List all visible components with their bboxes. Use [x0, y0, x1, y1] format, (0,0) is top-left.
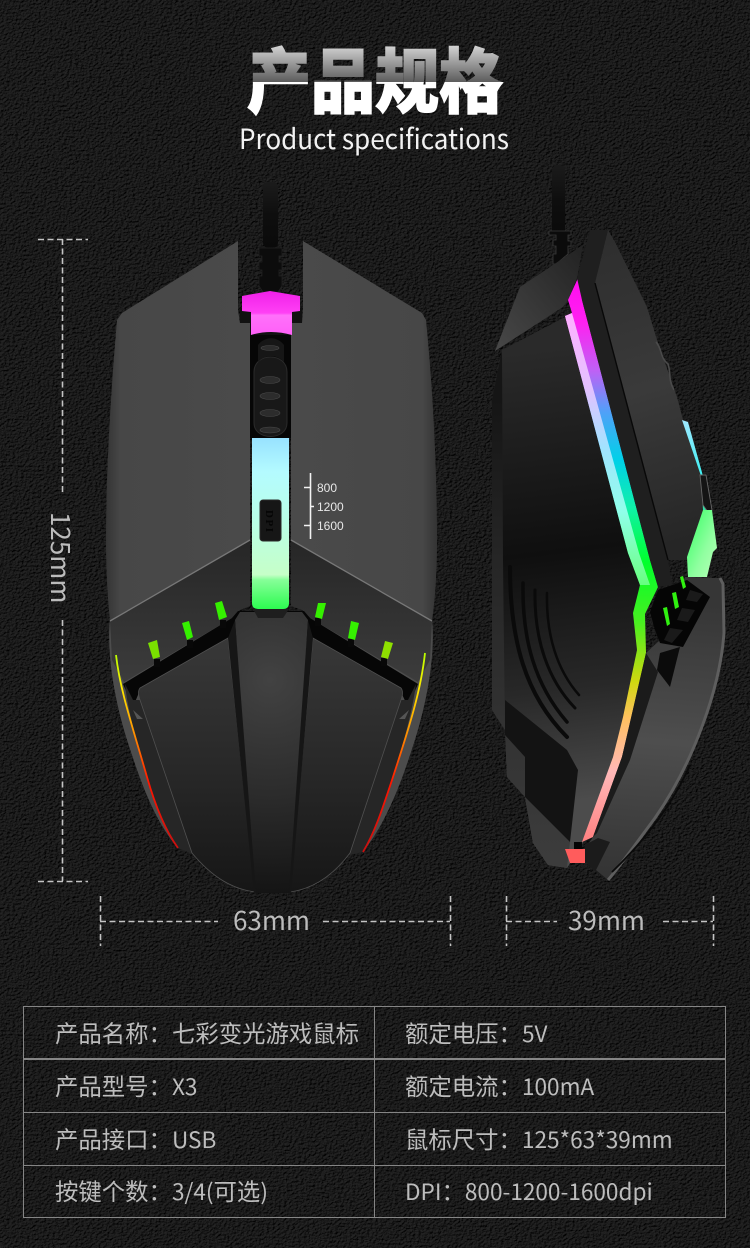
right chevron panel [291, 540, 432, 682]
side button [700, 475, 712, 512]
specifications table [24, 1006, 726, 1218]
side shell seam [595, 283, 668, 560]
green leds [148, 601, 393, 659]
palm left panel [138, 638, 255, 892]
side vent grills [510, 567, 579, 737]
left side strip panel [125, 684, 197, 856]
left chevron panel [110, 540, 250, 682]
right side strip panel [345, 684, 416, 856]
side view mouse [492, 165, 724, 880]
DPI scale: 800 [317, 481, 337, 495]
pink shoulders [240, 308, 302, 335]
black notch [574, 842, 582, 849]
side cable [549, 165, 571, 264]
left wing plate [106, 241, 250, 621]
centre channel [250, 320, 291, 438]
row 1 right: 额定电压：5V [405, 1015, 547, 1049]
left rgb strip [116, 655, 178, 848]
palm right panel [290, 638, 402, 892]
shell lower dark block [585, 838, 610, 880]
side dark band [577, 230, 672, 587]
cyan light [682, 420, 706, 510]
width dimension [100, 896, 450, 946]
side body left edge [492, 350, 570, 868]
black slot around palm [123, 611, 418, 707]
row 4 left: 按键个数：3/4(可选) [55, 1173, 268, 1207]
DPI scale: 1200 [317, 500, 344, 514]
side top wing [495, 245, 583, 351]
width dimension: 63mm [233, 901, 310, 938]
row 2 left: 产品型号：X3 [55, 1068, 197, 1102]
depth dimension [506, 896, 714, 946]
table row divider [24, 1058, 726, 1060]
subtitle: Product specifications [239, 118, 509, 158]
palm centre panel [235, 612, 308, 893]
glowing centre strip [252, 438, 289, 609]
DPI scale [304, 473, 344, 539]
table grid [24, 1006, 726, 1218]
lower outer shell [109, 618, 433, 853]
led tabs [154, 618, 387, 667]
palm rest [138, 609, 402, 893]
DPI button [260, 500, 281, 541]
height dimension: 125mm [43, 512, 80, 603]
side button cluster [650, 576, 710, 687]
right rgb strip [363, 653, 425, 852]
row 1 left: 产品名称：七彩变光游戏鼠标 [55, 1015, 359, 1049]
front view mouse [106, 182, 437, 893]
scroll wheel [254, 338, 287, 436]
chevron highlight lines [110, 540, 432, 621]
rgb strip pale band [565, 313, 650, 585]
rgb strip [565, 250, 658, 842]
DPI button: DPI [263, 510, 275, 532]
depth dimension: 39mm [568, 901, 645, 938]
height dimension [38, 239, 88, 882]
side wedge marks [133, 710, 409, 719]
side top shell [595, 230, 703, 560]
shell dark band [593, 653, 658, 837]
cable [259, 182, 282, 292]
green light [687, 510, 717, 577]
shell outer edge [608, 578, 724, 880]
pink light [242, 291, 300, 335]
shell black line [612, 765, 690, 872]
palm notch [253, 609, 289, 618]
palm shell [583, 577, 724, 880]
DPI scale: 1600 [317, 519, 344, 533]
row 3 left: 产品接口：USB [55, 1121, 216, 1155]
red light [565, 849, 585, 863]
side main body [492, 317, 640, 868]
row 2 right: 额定电流：100mA [405, 1068, 594, 1102]
palm grooves [228, 620, 313, 893]
side scroll wheel [656, 342, 674, 390]
row 3 right: 鼠标尺寸：125*63*39mm [405, 1121, 673, 1155]
right wing plate [291, 241, 437, 621]
row 4 right: DPI：800-1200-1600dpi [405, 1173, 653, 1207]
title: 产品规格 [247, 26, 503, 128]
side dark lower panel [505, 700, 578, 842]
